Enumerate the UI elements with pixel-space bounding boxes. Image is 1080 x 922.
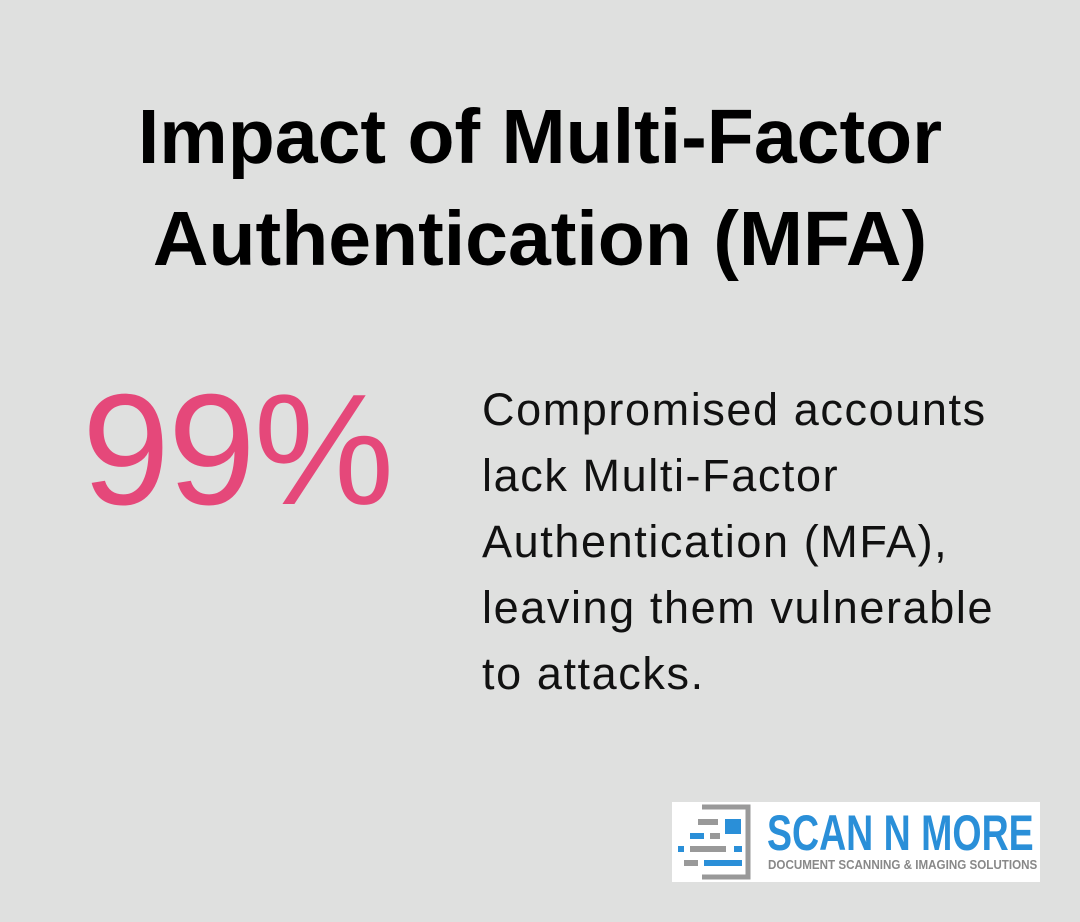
description text	[482, 384, 994, 699]
title	[138, 94, 942, 282]
title: Impact of Multi-Factor	[138, 94, 942, 180]
description text: lack Multi-Factor	[482, 450, 839, 501]
stat number: 99%	[82, 362, 392, 538]
logo	[672, 802, 1040, 882]
description text: Compromised accounts	[482, 384, 987, 435]
title: Authentication (MFA)	[153, 196, 927, 282]
brand name: SCAN N MORE	[767, 805, 1034, 861]
tagline: DOCUMENT SCANNING & IMAGING SOLUTIONS	[768, 858, 1037, 872]
description text: Authentication (MFA),	[482, 516, 948, 567]
icon: scanner	[678, 804, 750, 880]
description text: leaving them vulnerable	[482, 582, 994, 633]
description text: to attacks.	[482, 648, 705, 699]
